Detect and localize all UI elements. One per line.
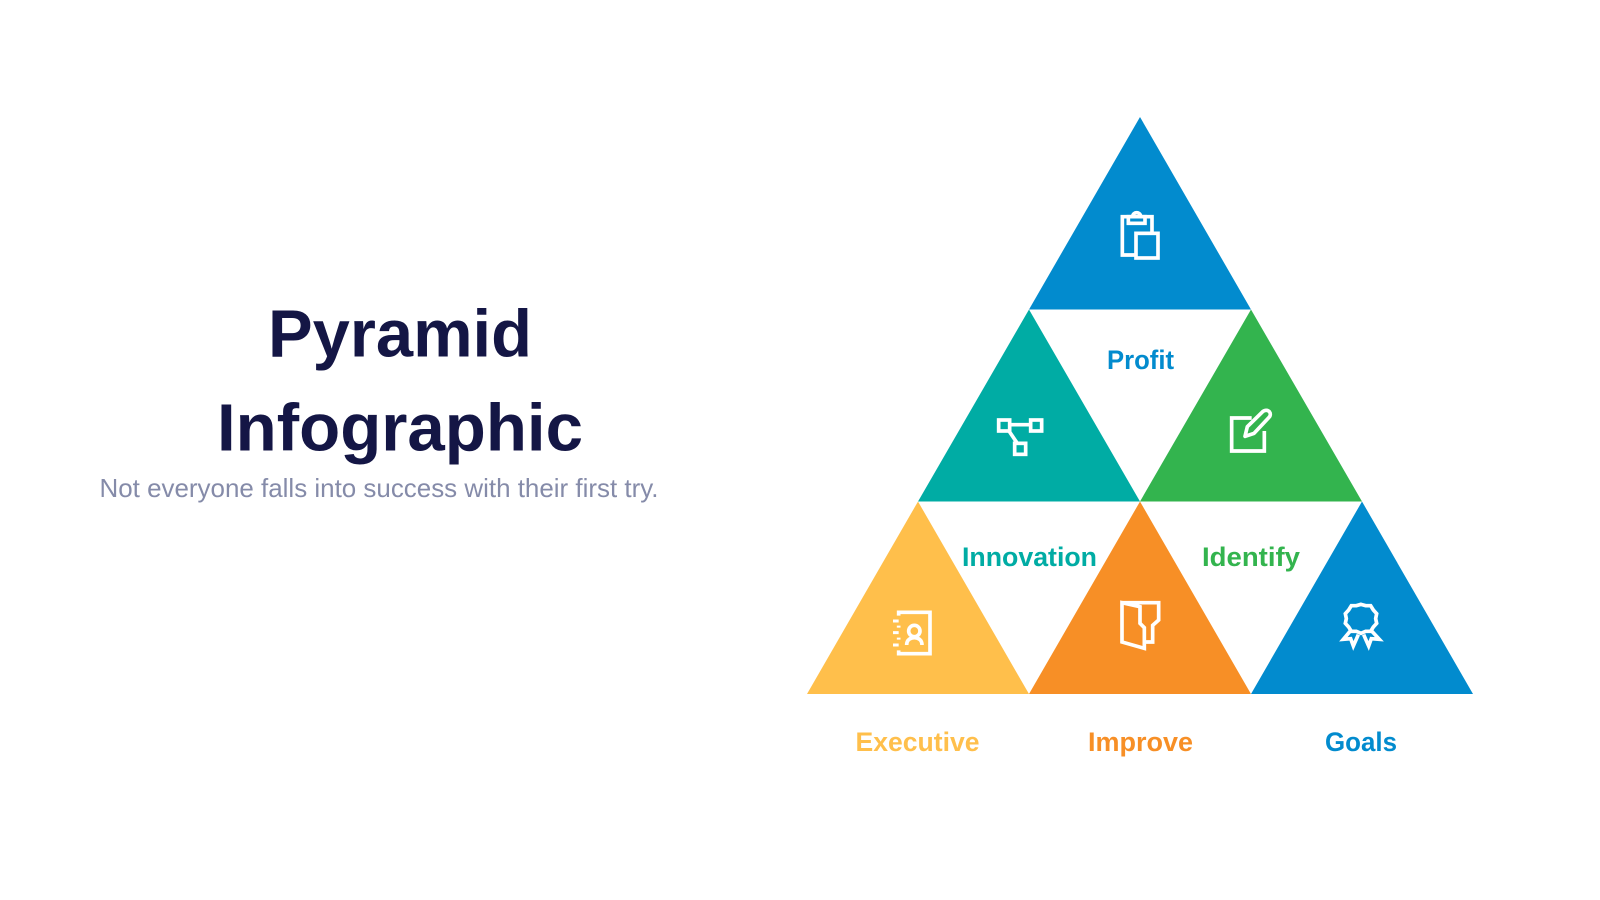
triangle: yellow — [807, 502, 1029, 694]
triangle: teal — [918, 310, 1140, 502]
pyramid diagram — [807, 117, 1473, 757]
icon: clipboard — [1122, 213, 1158, 258]
icon: pencil and note — [1232, 410, 1270, 451]
icon: award ribbon — [1343, 604, 1379, 646]
label: Executive: Executive — [856, 727, 980, 757]
triangle: orange — [1029, 502, 1251, 694]
title — [217, 296, 583, 466]
label: Profit: Profit — [1107, 345, 1174, 375]
icon: open door — [1122, 603, 1159, 648]
label: Identify: Identify — [1202, 542, 1300, 572]
title: Pyramid — [268, 296, 532, 372]
triangle: bottom blue — [1251, 502, 1473, 694]
label: Innovation: Innovation — [962, 542, 1097, 572]
label: Improve: Improve — [1088, 727, 1193, 757]
icon: address book — [893, 612, 930, 654]
triangle: top blue — [1029, 117, 1251, 310]
title: Infographic — [217, 390, 583, 466]
triangle: green — [1140, 310, 1362, 502]
subtitle: Not everyone falls into success with their first try. — [100, 473, 658, 503]
label: Goals: Goals — [1325, 727, 1397, 757]
icon: network nodes — [999, 420, 1042, 454]
